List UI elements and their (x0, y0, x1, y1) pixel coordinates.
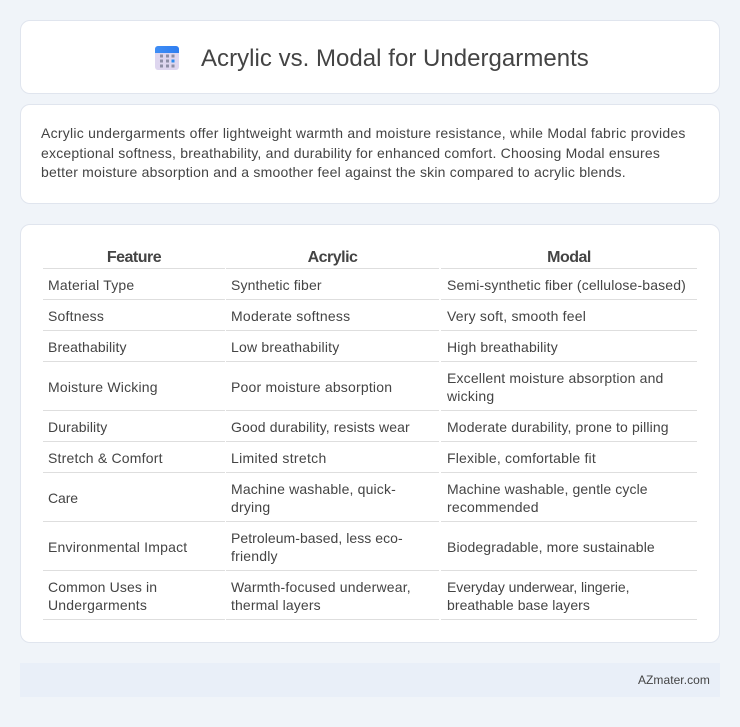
row: material type (43, 277, 697, 300)
comparison table: Synthetic fiber (231, 277, 322, 293)
text block: intro (41, 125, 686, 180)
comparison table: Everyday underwear, lingerie, (447, 579, 629, 595)
comparison table: Limited stretch (231, 450, 327, 466)
comparison table: Modal (547, 249, 591, 266)
text block: intro: Acrylic undergarments offer lightweight warmth and moisture resistance, while Modal fabric provides (41, 125, 686, 141)
comparison table: breathable base layers (447, 597, 590, 613)
comparison table: Stretch & Comfort (48, 450, 163, 466)
footer text: AZmater.com (638, 673, 710, 687)
comparison table: Moderate softness (231, 308, 350, 324)
comparison table: Biodegradable, more sustainable (447, 539, 655, 555)
comparison table: Moderate durability, prone to pilling (447, 419, 669, 435)
comparison table: Flexible, comfortable fit (447, 450, 596, 466)
comparison table: Material Type (48, 277, 134, 293)
comparison table: Undergarments (48, 597, 147, 613)
row: stretch and comfort (43, 450, 697, 473)
comparison table: Common Uses in (48, 579, 157, 595)
comparison table: Breathability (48, 339, 127, 355)
comparison table: Warmth-focused underwear, (231, 579, 411, 595)
row: care (43, 481, 697, 522)
panel: comparison table card (20, 224, 720, 643)
comparison table: drying (231, 499, 270, 515)
comparison table: Moisture Wicking (48, 379, 158, 395)
comparison table: Environmental Impact (48, 539, 187, 555)
row: common uses (43, 579, 697, 620)
comparison table: wicking (447, 388, 494, 404)
comparison table: Care (48, 490, 78, 506)
icon: calendar (155, 46, 179, 70)
comparison table: Acrylic (308, 249, 357, 266)
comparison table: Feature (107, 249, 161, 266)
comparison table: Very soft, smooth feel (447, 308, 586, 324)
row: environmental impact (43, 530, 697, 571)
comparison table: friendly (231, 548, 278, 564)
panel: intro card (20, 104, 720, 204)
text block: intro: exceptional softness, breathability, and durability for enhanced comfort. Choosing Modal ensures (41, 144, 660, 160)
footer bar (20, 663, 720, 697)
row: breathability (43, 339, 697, 362)
comparison table: Durability (48, 419, 107, 435)
text block: intro: better moisture absorption and a smoother feel against the skin compared to acrylic blends. (41, 164, 626, 180)
comparison table: Low breathability (231, 339, 339, 355)
comparison table: Petroleum-based, less eco- (231, 530, 403, 546)
comparison table: Semi-synthetic fiber (cellulose-based) (447, 277, 686, 293)
comparison table: Machine washable, gentle cycle (447, 481, 648, 497)
comparison table: Machine washable, quick- (231, 481, 396, 497)
title: Acrylic vs. Modal for Undergarments (201, 45, 589, 72)
panel: title card (20, 20, 720, 94)
comparison table: High breathability (447, 339, 558, 355)
comparison table: Poor moisture absorption (231, 379, 392, 395)
comparison table: Softness (48, 308, 104, 324)
comparison table: Good durability, resists wear (231, 419, 410, 435)
row: softness (43, 308, 697, 331)
comparison table: Excellent moisture absorption and (447, 370, 664, 386)
row: moisture wicking (43, 370, 697, 411)
comparison table: recommended (447, 499, 539, 515)
table header (43, 249, 697, 269)
row: durability (43, 419, 697, 442)
comparison table: thermal layers (231, 597, 321, 613)
